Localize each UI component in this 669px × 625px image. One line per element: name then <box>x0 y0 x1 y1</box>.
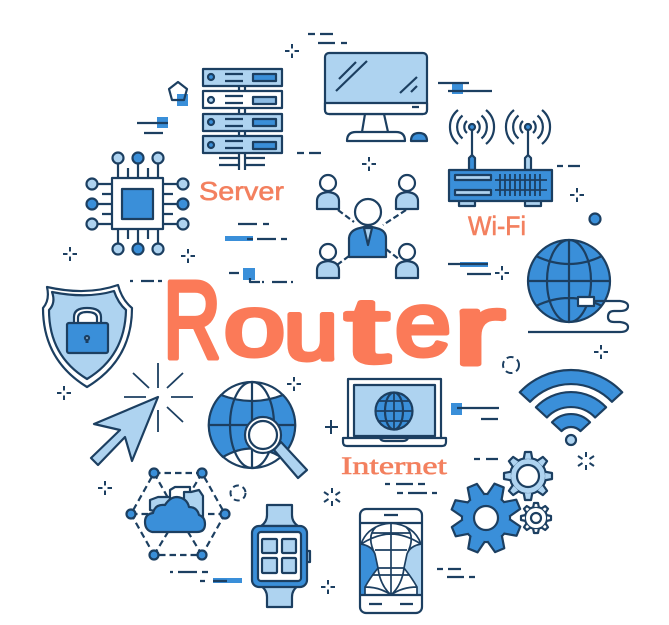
title: Router: t <box>345 280 389 382</box>
icon: gears <box>451 452 552 553</box>
icon: smartphone <box>360 509 422 613</box>
icon: click cursor <box>91 363 193 465</box>
icon: ball <box>590 214 600 224</box>
icon: server rack <box>203 69 282 170</box>
label: Server: Server <box>199 176 284 206</box>
decorative dashes and squares <box>130 34 580 583</box>
icon: light blue gear <box>504 452 552 500</box>
title: Router: R <box>163 259 221 382</box>
title: Router: e <box>395 275 451 375</box>
label: Internet: Internet <box>341 453 447 480</box>
icon: large blue gear <box>451 483 521 553</box>
icon: wifi signal <box>520 370 622 445</box>
label: Wi-Fi: Wi-Fi <box>468 211 526 241</box>
icon: globe search <box>209 382 307 478</box>
title: Router: u <box>284 283 338 377</box>
icon: globe with cable <box>528 240 628 332</box>
icon: Wi-Fi router <box>449 110 552 206</box>
icon: desktop monitor <box>325 53 427 141</box>
icon: team network <box>317 175 418 278</box>
icon: security shield <box>43 285 132 387</box>
decorative sparkles <box>57 44 608 594</box>
title: Router: o <box>224 279 285 373</box>
icon: laptop with globe <box>343 379 446 446</box>
icon: cloud folders network <box>126 468 230 560</box>
icon: microchip <box>86 152 188 254</box>
icon: pentagon <box>169 82 187 100</box>
icon: smart watch <box>252 505 310 607</box>
icon: small white gear <box>521 503 551 533</box>
title: Router: r <box>453 274 505 386</box>
